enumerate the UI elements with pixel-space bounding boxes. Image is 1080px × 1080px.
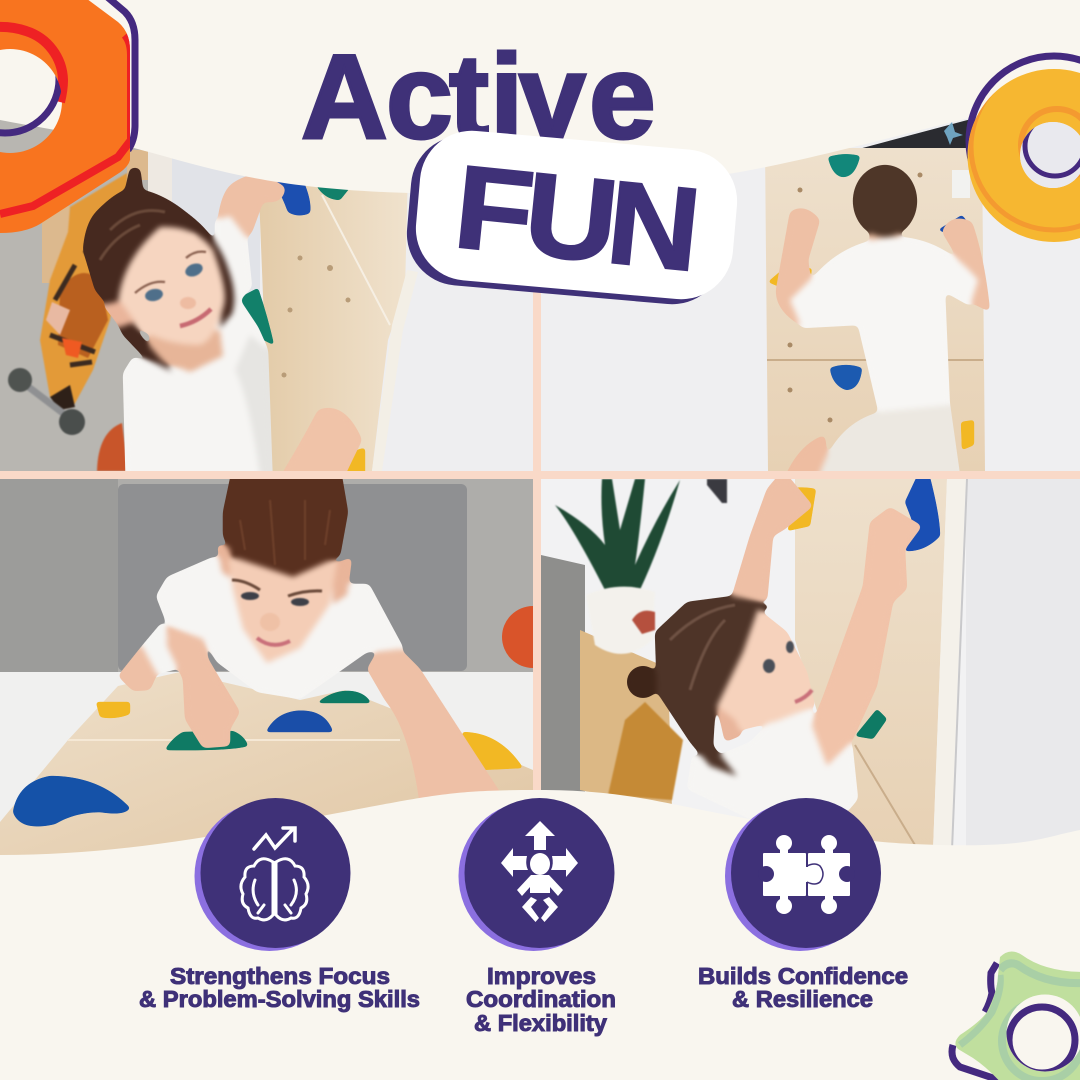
boy [776,165,990,490]
caption: focus: & Problem-Solving Skills [139,986,420,1012]
badge: brain icon [194,798,350,951]
climbing holds [768,154,975,450]
climbing holds [787,470,940,739]
girl [83,168,362,490]
longboard [608,702,683,800]
decoration: orange hexagon nut [0,0,135,233]
title badge: FUN: FUN [449,141,706,297]
caption: confidence [698,963,908,1012]
caption: coordination: & Flexibility [474,1010,607,1036]
climbing holds [235,177,365,480]
girl's facial features [100,210,211,326]
t-shirt [156,557,404,699]
caption: coordination [466,963,616,1036]
photo: girl climbing beside plant [541,479,1080,846]
top wave panel [0,0,1080,194]
title badge: FUN [403,126,741,309]
icon: puzzle pieces [758,835,855,914]
hair [83,168,234,372]
photo: boy climbing wall from behind [541,116,1080,471]
photo: girl climbing wall with longboard [0,120,533,471]
decoration: green gear [952,951,1080,1080]
caption: coordination: Coordination [466,986,616,1012]
badge: baby with arrows icon [458,798,614,951]
badge: puzzle icon [725,798,881,951]
bottom wave panel [0,790,1080,1080]
decoration: yellow ring [968,56,1080,242]
caption: coordination: Improves [487,963,596,989]
face [118,227,225,345]
girl [627,470,922,819]
photo: boy reaching across horizontal wall [0,479,533,855]
boy [118,465,505,805]
arms [167,627,240,748]
boy's facial features [232,500,330,645]
caption: confidence: & Resilience [732,986,873,1012]
caption: focus [139,963,420,1012]
head [217,544,352,604]
girl's facial features [670,605,812,702]
caption: confidence: Builds Confidence [698,963,908,989]
icon: brain [241,859,308,920]
plant [555,479,727,654]
climbing holds [13,691,523,826]
caption: focus: Strengthens Focus [170,963,390,989]
longboard [8,173,128,471]
icon: baby and arrows [501,821,578,922]
icon: rising arrow [254,828,295,849]
title: Active: Active [301,30,656,164]
